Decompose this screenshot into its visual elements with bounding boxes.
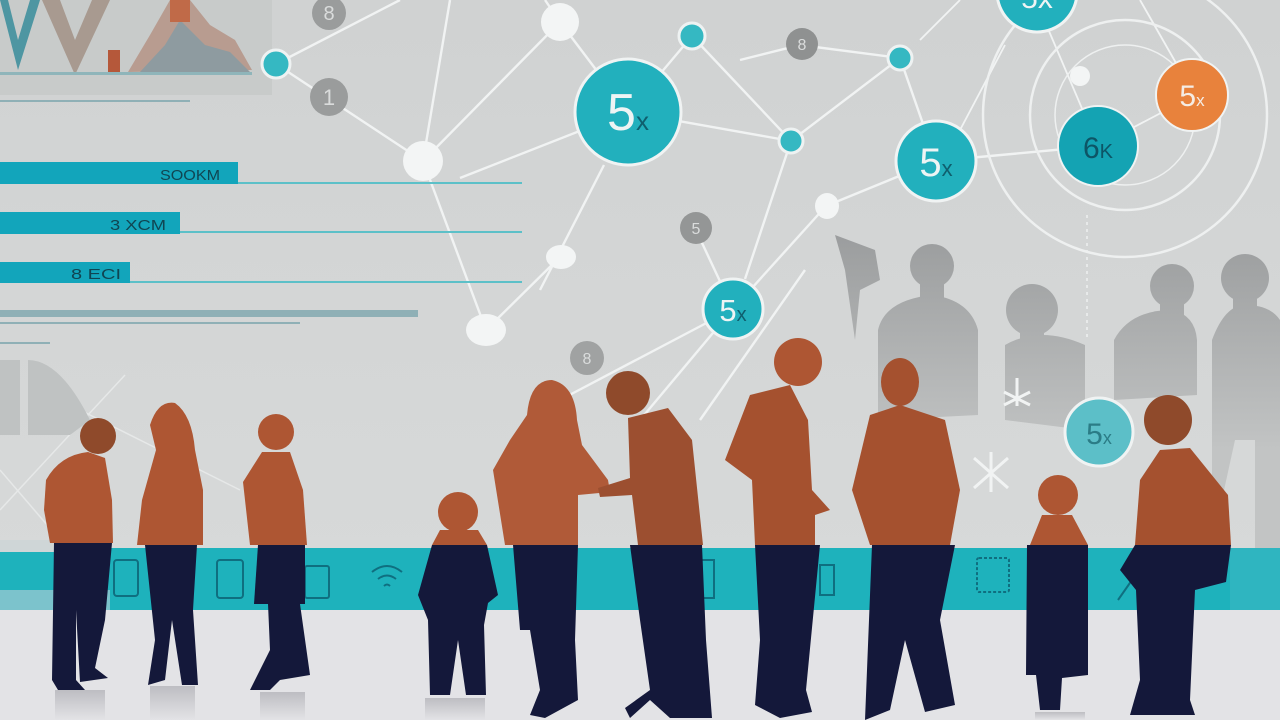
node: lower 5x: 5x — [719, 293, 747, 328]
woman center — [493, 380, 610, 718]
man center right — [852, 358, 960, 720]
gray numbered badges: 5 — [692, 221, 701, 238]
bar 1 — [0, 162, 522, 184]
node: medium 5x — [896, 121, 976, 201]
bar 2 — [0, 212, 522, 234]
gray numbered badges: 1 — [323, 85, 335, 110]
node: 6K: 6K — [1083, 132, 1114, 165]
bar 1: SOOKM — [160, 167, 220, 184]
node: lower 5x — [703, 279, 763, 339]
node: medium 5x: 5x — [919, 141, 953, 185]
gray numbered badges: 8 — [583, 351, 592, 368]
child left — [418, 492, 498, 695]
gray numbered badges — [310, 0, 818, 375]
teal band — [0, 540, 1280, 610]
floor shadows — [55, 686, 1085, 720]
background gray silhouettes — [835, 235, 1280, 548]
node: orange 5x: 5x — [1179, 80, 1205, 113]
node: large 5x — [575, 59, 681, 165]
man bending — [598, 371, 712, 718]
gray numbered badges: 8 — [798, 37, 807, 54]
child right — [1026, 475, 1088, 710]
left background shapes — [0, 360, 90, 435]
person 3 — [243, 414, 310, 690]
bar 3 — [0, 262, 522, 283]
icon: snowflake upper — [1004, 378, 1030, 406]
top-left chart thumbnail — [0, 0, 272, 95]
node: small 5x halo — [1065, 398, 1133, 466]
person 1 — [44, 418, 116, 690]
white nodes — [403, 3, 1090, 346]
bar 3: 8 ECI — [71, 266, 121, 283]
node: top 5x — [997, 0, 1077, 32]
icon: snowflake lower — [974, 452, 1008, 492]
node: 6K — [1058, 106, 1138, 186]
node: small 5x halo: 5x — [1086, 418, 1112, 451]
faint background lines — [0, 375, 240, 540]
man with backpack — [1120, 395, 1231, 715]
concentric rings — [983, 0, 1267, 340]
fine text lines — [0, 100, 418, 344]
small teal nodes — [262, 23, 912, 153]
bar 2: 3 XCM — [110, 217, 166, 234]
floor — [0, 610, 1280, 720]
network lines — [276, 0, 1195, 420]
node: orange 5x — [1156, 59, 1228, 131]
gray numbered badges: 8 — [323, 3, 335, 25]
man with phone — [725, 338, 830, 718]
node: large 5x: 5x — [607, 84, 649, 142]
person 2 — [137, 403, 203, 685]
